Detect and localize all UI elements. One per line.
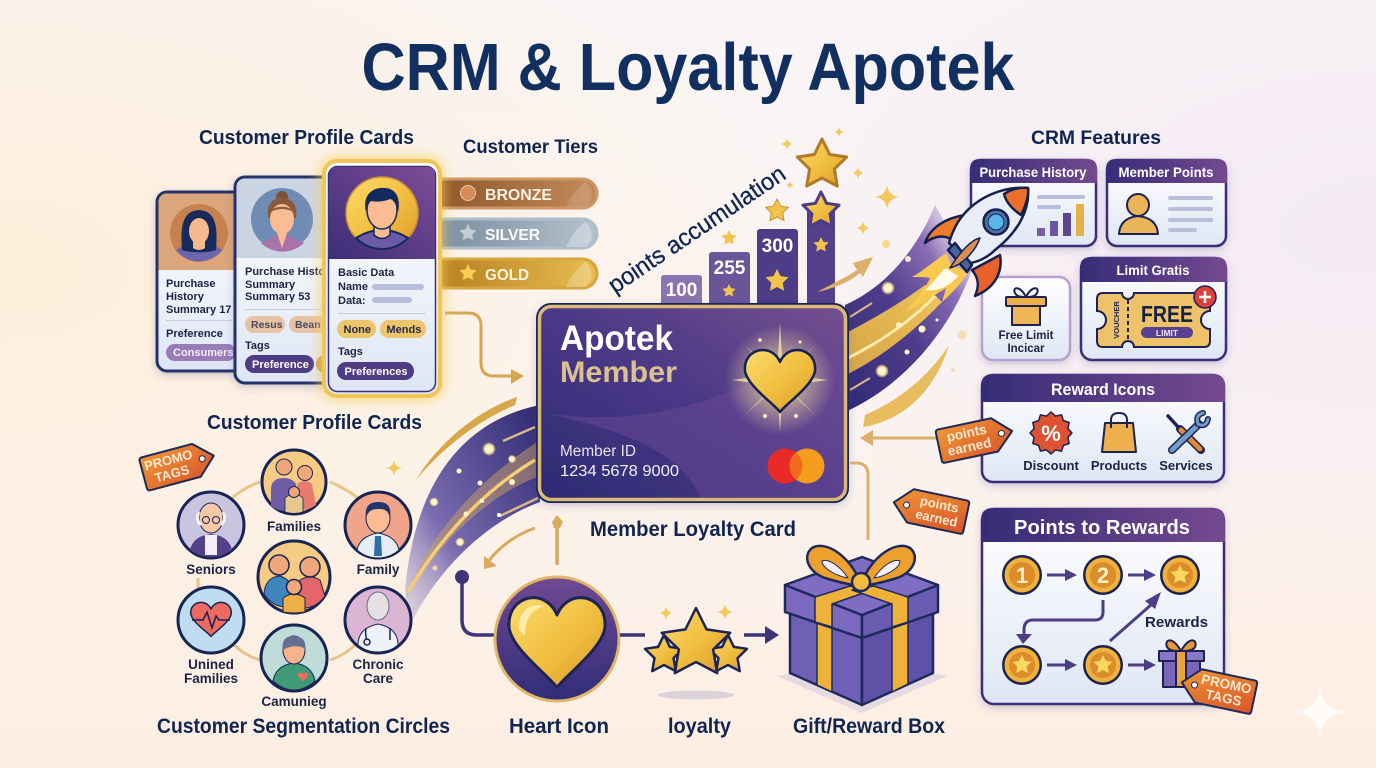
voucher ticket: LIMIT xyxy=(1156,328,1179,338)
icon: rocket xyxy=(925,188,1028,296)
rotated label: points accumulation: points accumulation xyxy=(603,160,791,299)
circle: family doctor xyxy=(345,492,411,558)
avatar: man on gold xyxy=(346,177,418,249)
card name xyxy=(560,319,677,389)
points earned tag right: earned xyxy=(946,435,993,459)
tier badges xyxy=(425,179,597,288)
promo tag left: PROMO xyxy=(143,446,194,474)
icon: bag xyxy=(1102,413,1136,452)
heading: crm features: CRM Features xyxy=(1031,128,1161,149)
card name: Member xyxy=(560,356,677,389)
icon: discount xyxy=(1030,412,1072,454)
bar 255 xyxy=(709,252,750,308)
points accumulation bars xyxy=(661,207,835,309)
connector: heart to stars xyxy=(620,633,645,637)
panel: free limit tile: Free Limit xyxy=(999,330,1054,342)
icon: gift xyxy=(1006,288,1046,325)
promo tag right: TAGS xyxy=(1204,687,1243,709)
card heart with glow xyxy=(725,322,835,435)
circle: heart health xyxy=(178,587,244,653)
panel: profile card 1 xyxy=(157,192,257,371)
avatar: woman with bun xyxy=(251,188,313,252)
icon: tools xyxy=(1168,413,1208,450)
card mastercard logo xyxy=(768,448,824,484)
panel: profile card 2: Purchase Histo xyxy=(245,266,325,278)
promo tag left: TAGS xyxy=(153,462,191,485)
tier: bronze xyxy=(425,179,597,208)
bar 300: 300 xyxy=(762,236,793,257)
swoosh: points flow xyxy=(405,205,972,625)
panel: profile card 3 highlighted: Mends xyxy=(386,324,421,336)
panel: profile card 2: Bean xyxy=(295,319,321,331)
arrow: heart to card xyxy=(484,515,563,569)
label: loyalty: loyalty xyxy=(668,715,731,738)
panel: purchase history xyxy=(970,159,1097,246)
label: rewards: Rewards xyxy=(1145,614,1208,631)
tier: gold xyxy=(425,259,597,288)
plus badge xyxy=(1194,286,1216,308)
label: unined families xyxy=(184,657,238,686)
promo tag right xyxy=(1178,666,1258,714)
panel: profile card 3 highlighted: Data: xyxy=(338,295,366,307)
label: unined families: Families xyxy=(184,671,238,686)
mini bar chart xyxy=(1037,195,1085,236)
panel: free limit tile xyxy=(982,277,1070,360)
coin 2 xyxy=(1083,555,1123,595)
reward labels: Discount xyxy=(1023,458,1079,473)
reward labels: Products xyxy=(1091,458,1147,473)
panel: profile card 2: Tags xyxy=(245,340,270,352)
label: unined families: Unined xyxy=(188,657,234,672)
panel: profile card 1: Purchase xyxy=(166,278,216,290)
tier: silver xyxy=(425,219,597,248)
panel: profile card 2: Summary 53 xyxy=(245,291,310,303)
circle: seniors xyxy=(178,492,244,558)
panel: reward icons: Reward Icons xyxy=(1051,381,1155,399)
card member id: Member ID xyxy=(560,443,636,460)
arrow: growth xyxy=(817,257,873,292)
coin star lower left xyxy=(1002,645,1042,685)
panel: profile card 2: Preference xyxy=(252,359,309,371)
coin 1: 1 xyxy=(1016,563,1028,588)
label: heart icon: Heart Icon xyxy=(509,715,609,738)
circle: chronic care xyxy=(345,587,411,653)
coin 1 xyxy=(1002,555,1042,595)
panel: points to rewards: Points to Rewards xyxy=(1014,516,1190,539)
watermark sparkle xyxy=(1295,686,1345,738)
tier: silver: SILVER xyxy=(485,227,540,244)
circle: families xyxy=(262,450,326,514)
heart icon xyxy=(495,577,619,701)
panel: free limit tile: Incicar xyxy=(1007,343,1045,355)
label: families: Families xyxy=(267,519,321,534)
card name: Apotek xyxy=(560,319,674,358)
label: camunieg: Camunieg xyxy=(261,694,327,709)
reward labels xyxy=(1023,458,1213,473)
points earned tag centre: points xyxy=(919,493,960,516)
stars and sparkles xyxy=(721,127,899,248)
bar 300 xyxy=(757,229,798,309)
panel: profile card 3 highlighted: Preferences xyxy=(344,366,408,378)
panel: limit gratis xyxy=(1080,257,1227,360)
panel: member points: Member Points xyxy=(1118,164,1214,180)
reward labels: Services xyxy=(1159,458,1213,473)
connector: card to gift xyxy=(850,463,868,540)
coin 2: 2 xyxy=(1097,563,1109,588)
label: gift reward box: Gift/Reward Box xyxy=(793,715,945,738)
panel: profile card 3 highlighted: Basic Data xyxy=(338,267,395,279)
arrow: rewards to card xyxy=(860,430,937,446)
circle: central family xyxy=(258,541,330,613)
panel: profile card 2: Summary xyxy=(245,279,296,291)
heading: customer segmentation circles: Customer Segmentation Circles xyxy=(157,715,450,738)
icon: discount: % xyxy=(1041,421,1061,446)
panel: profile card 3 highlighted xyxy=(320,157,444,400)
avatar: woman xyxy=(170,204,228,262)
label: chronic care: Chronic xyxy=(352,657,404,672)
panel: profile card 3 highlighted: Tags xyxy=(338,346,363,358)
card member id: 1234 5678 9000 xyxy=(560,463,679,480)
coin star top xyxy=(1160,555,1200,595)
points earned tag right: points xyxy=(945,422,988,445)
gift bow xyxy=(807,546,915,591)
panel: profile card 3 highlighted: None xyxy=(344,324,371,336)
segmentation circles xyxy=(178,450,411,709)
bar 100: 100 xyxy=(666,280,697,301)
flow arrows xyxy=(1016,569,1161,671)
panel: profile card 1: Consumers xyxy=(173,347,234,359)
card member id xyxy=(560,443,679,480)
voucher ticket xyxy=(1097,293,1210,347)
heading: customer tiers: Customer Tiers xyxy=(463,137,598,158)
panel: purchase history: Purchase History xyxy=(980,164,1087,180)
ring connector xyxy=(198,482,358,660)
bar 100 xyxy=(661,275,702,309)
coin star lower mid xyxy=(1083,645,1123,685)
member loyalty card xyxy=(536,303,849,503)
panel: limit gratis: Limit Gratis xyxy=(1116,262,1190,278)
panel: reward icons xyxy=(981,374,1225,482)
points earned tag centre xyxy=(890,486,970,534)
icon: small gift xyxy=(1159,640,1204,687)
loyalty stars xyxy=(645,604,747,700)
arrow: stars to gift xyxy=(744,626,779,644)
label: seniors: Seniors xyxy=(186,562,236,577)
tier: bronze: BRONZE xyxy=(485,187,552,204)
title: CRM & Loyalty Apotek xyxy=(362,30,1015,105)
panel: profile card 1: History xyxy=(166,291,205,303)
bar 255: 255 xyxy=(714,258,746,279)
sparkle near swoosh xyxy=(386,460,402,476)
promo tag left xyxy=(139,439,218,491)
panel: profile card 1: Preference xyxy=(166,328,223,340)
panel: points to rewards xyxy=(981,508,1225,704)
tier: gold: GOLD xyxy=(485,267,529,284)
promo tag right: PROMO xyxy=(1200,671,1253,697)
gift reward box xyxy=(777,546,947,713)
voucher ticket: FREE xyxy=(1141,301,1193,327)
heading: customer profile cards lower: Customer Profile Cards xyxy=(207,412,422,434)
panel: member points xyxy=(1106,159,1227,246)
label: chronic care xyxy=(352,657,404,686)
points earned tag centre: earned xyxy=(914,506,959,530)
bar top xyxy=(807,207,835,309)
heading: customer profile cards top: Customer Profile Cards xyxy=(199,127,414,149)
label: chronic care: Care xyxy=(363,671,393,686)
label: family: Family xyxy=(357,562,400,577)
detail lines xyxy=(1168,196,1213,232)
connector: segments to heart xyxy=(455,570,496,635)
heading: member loyalty card: Member Loyalty Card xyxy=(590,518,796,541)
circle: community xyxy=(261,625,327,691)
panel: profile card 3 highlighted: Name xyxy=(338,281,368,293)
panel: profile card 2: Resus xyxy=(251,319,283,331)
panel: profile card 2 xyxy=(235,177,336,383)
voucher ticket: VOUCHER xyxy=(1112,301,1121,339)
person icon xyxy=(1119,194,1158,234)
panel: profile card 1: Summary 17 xyxy=(166,304,231,316)
points earned tag right xyxy=(935,414,1016,463)
arrow: profile to card xyxy=(445,313,524,384)
